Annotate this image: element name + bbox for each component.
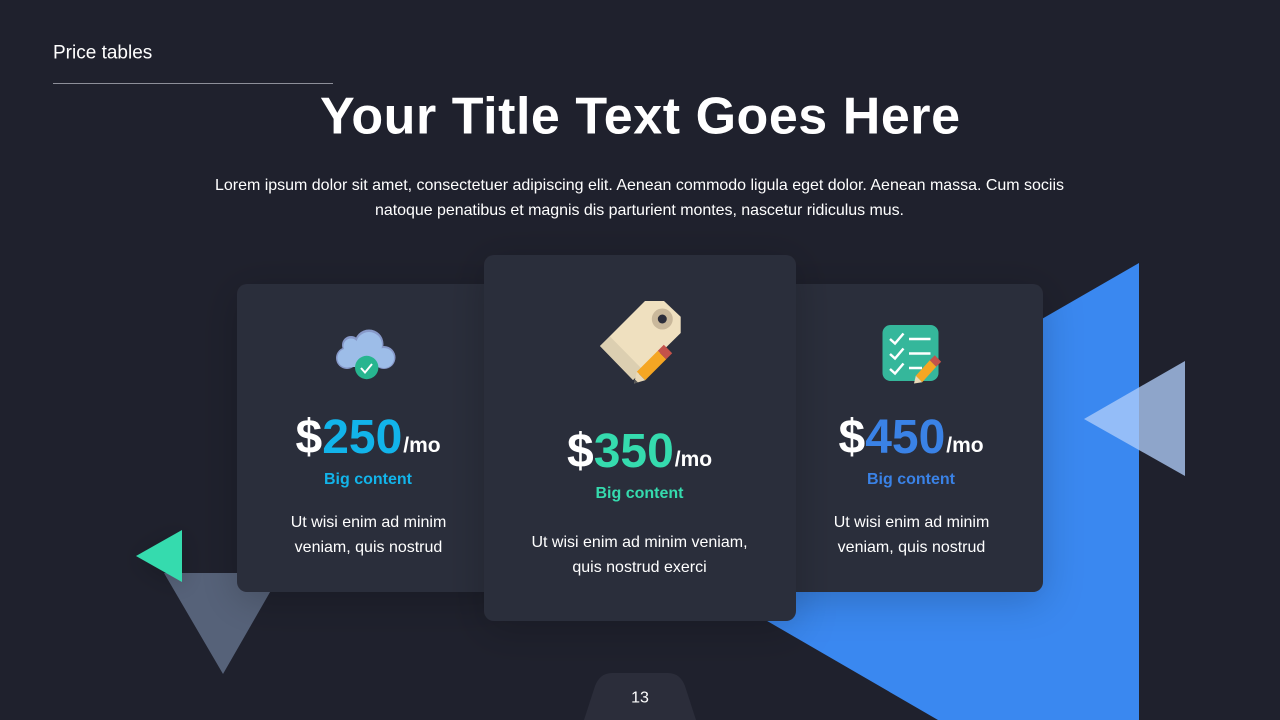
translucent light triangle [1084, 361, 1185, 476]
price: 450: /mo [946, 434, 984, 457]
panel: centre price card [484, 255, 796, 621]
title: Your Title Text Goes Here [320, 88, 960, 146]
price: 350: /mo [675, 448, 712, 471]
plan description [291, 514, 446, 556]
plan description [834, 514, 989, 556]
panel: left price card [237, 284, 507, 592]
plan name: Big content [324, 471, 413, 488]
page number tab: 13 [631, 690, 649, 706]
price: 450: $450 [838, 411, 945, 464]
plan description: veniam, quis nostrud [838, 539, 985, 556]
price: 250: $250 [296, 411, 402, 464]
plan description [531, 534, 748, 576]
grey triangle [164, 573, 281, 674]
intro paragraph [215, 177, 1064, 219]
plan name: Big content [596, 485, 684, 502]
plan description: quis nostrud exerci [572, 559, 707, 576]
icon: cloud with check [336, 330, 396, 379]
plan name: Big content [867, 471, 956, 488]
intro paragraph: Lorem ipsum dolor sit amet, consectetuer adipiscing elit. Aenean commodo ligula eget dolor. Aenean massa. Cum sociis [215, 177, 1064, 194]
large blue triangle [643, 263, 1139, 720]
plan description: Ut wisi enim ad minim [291, 514, 446, 531]
section label: Price tables [53, 42, 152, 64]
page number tab [584, 673, 696, 720]
plan description: Ut wisi enim ad minim veniam, [531, 534, 748, 551]
green triangle [136, 530, 182, 582]
plan description: Ut wisi enim ad minim [834, 514, 989, 531]
price: 250: /mo [403, 434, 441, 457]
panel: right price card [773, 284, 1043, 592]
icon: price tag with pencil [600, 301, 681, 384]
intro paragraph: natoque penatibus et magnis dis parturient montes, nascetur ridiculus mus. [375, 202, 904, 219]
plan description: veniam, quis nostrud [295, 539, 442, 556]
icon: checklist with pencil [882, 325, 941, 384]
price: 350: $350 [567, 425, 674, 478]
